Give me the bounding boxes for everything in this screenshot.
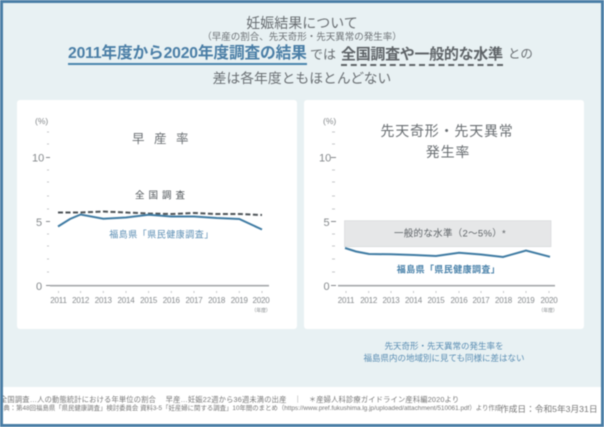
- x axis years right: [338, 296, 558, 314]
- x axis years: 2020: [252, 296, 270, 305]
- x axis years right: 2018: [495, 296, 513, 305]
- headline line 2: 差は各年度ともほとんどない: [213, 71, 391, 86]
- x axis years: 2012: [72, 296, 90, 305]
- footnote: creation date: 作成日：令和5年3月31日: [500, 404, 598, 414]
- chart title right: 先天奇形・先天異常: [380, 123, 514, 139]
- x axis years: 2013: [95, 296, 113, 305]
- label: general range: 一般的な水準（2〜5%）*: [394, 228, 506, 240]
- x axis years right: 2012: [360, 296, 378, 305]
- headline connector: では: [310, 46, 336, 62]
- x axis years right: 2020: [540, 296, 558, 305]
- footnote: definitions: 全国調査…人の動態統計における年単位の割合 早産…妊娠22週から36週未満の出産 ｜ ＊産婦人科診療ガイドライン産科編2020より: [0, 395, 459, 404]
- x axis years: 2017: [186, 296, 203, 305]
- note text: 福島県内の地域別に見ても同様に差はない: [363, 353, 525, 363]
- y axis labels: (%): [35, 116, 48, 126]
- note text: [363, 341, 525, 363]
- y axis labels: 5: [36, 217, 42, 229]
- y axis labels right: [319, 116, 549, 293]
- x axis years right: 2017: [472, 296, 490, 305]
- x axis years: 2011: [50, 296, 67, 305]
- y axis labels: [32, 116, 262, 293]
- axis line: [50, 285, 269, 287]
- label: national survey: 全国調査: [135, 190, 189, 202]
- x axis years: 2016: [163, 296, 181, 305]
- footer band: [0, 387, 604, 427]
- Fukushima line: [58, 214, 262, 230]
- x axis years: （年度）: [251, 307, 271, 314]
- x axis years: 2014: [118, 296, 135, 305]
- x axis years right: 2011: [338, 296, 355, 305]
- chart title right: [380, 123, 514, 160]
- dashed underlined phrase: 全国調査や一般的な水準: [341, 46, 503, 62]
- headline ending: との: [508, 47, 533, 61]
- x axis years: 2015: [140, 296, 158, 305]
- label: Fukushima survey: 福島県「県民健康調査」: [109, 228, 214, 240]
- x axis years right: 2019: [518, 296, 535, 305]
- Fukushima line right: [345, 248, 550, 257]
- x axis years: 2019: [231, 296, 249, 305]
- chart title right: 発生率: [426, 144, 470, 160]
- title line 1: 妊娠結果について: [246, 15, 358, 31]
- x axis years: 2018: [208, 296, 226, 305]
- axis line right: [338, 285, 555, 287]
- highlighted headline: 2011年度から2020年度調査の結果: [68, 45, 307, 62]
- note text: 先天奇形・先天異常の発生率を: [384, 341, 504, 351]
- y axis labels right: 0: [324, 281, 330, 293]
- x axis years right: 2013: [382, 296, 400, 305]
- y axis labels: 0: [36, 281, 42, 293]
- footnote: source: 出典：第48回福島県「県民健康調査」検討委員会 資料3-5「妊産婦に関する調査」10年間のまとめ（https://www.pref.fukushima.lg.jp/uploaded/attachment/510061.pdf）より作成: [0, 404, 501, 412]
- x axis years right: 2014: [405, 296, 423, 305]
- heading: [67, 15, 533, 86]
- label: Fukushima survey right: 福島県「県民健康調査」: [397, 264, 500, 274]
- y axis labels right: (%): [323, 116, 336, 126]
- y axis labels: 10: [32, 152, 44, 164]
- national survey dashed line: [58, 212, 262, 215]
- x axis years right: 2016: [450, 296, 468, 305]
- x axis years right: （年度）: [538, 307, 558, 314]
- subtitle: （早産の割合、先天奇形・先天異常の発生率）: [202, 32, 402, 43]
- y axis labels right: 10: [319, 152, 331, 164]
- general range band: [344, 221, 551, 247]
- y axis labels right: 5: [324, 217, 330, 229]
- chart title: 早産率: [132, 132, 198, 146]
- x axis years right: 2015: [428, 296, 445, 305]
- x axis years: [50, 296, 271, 314]
